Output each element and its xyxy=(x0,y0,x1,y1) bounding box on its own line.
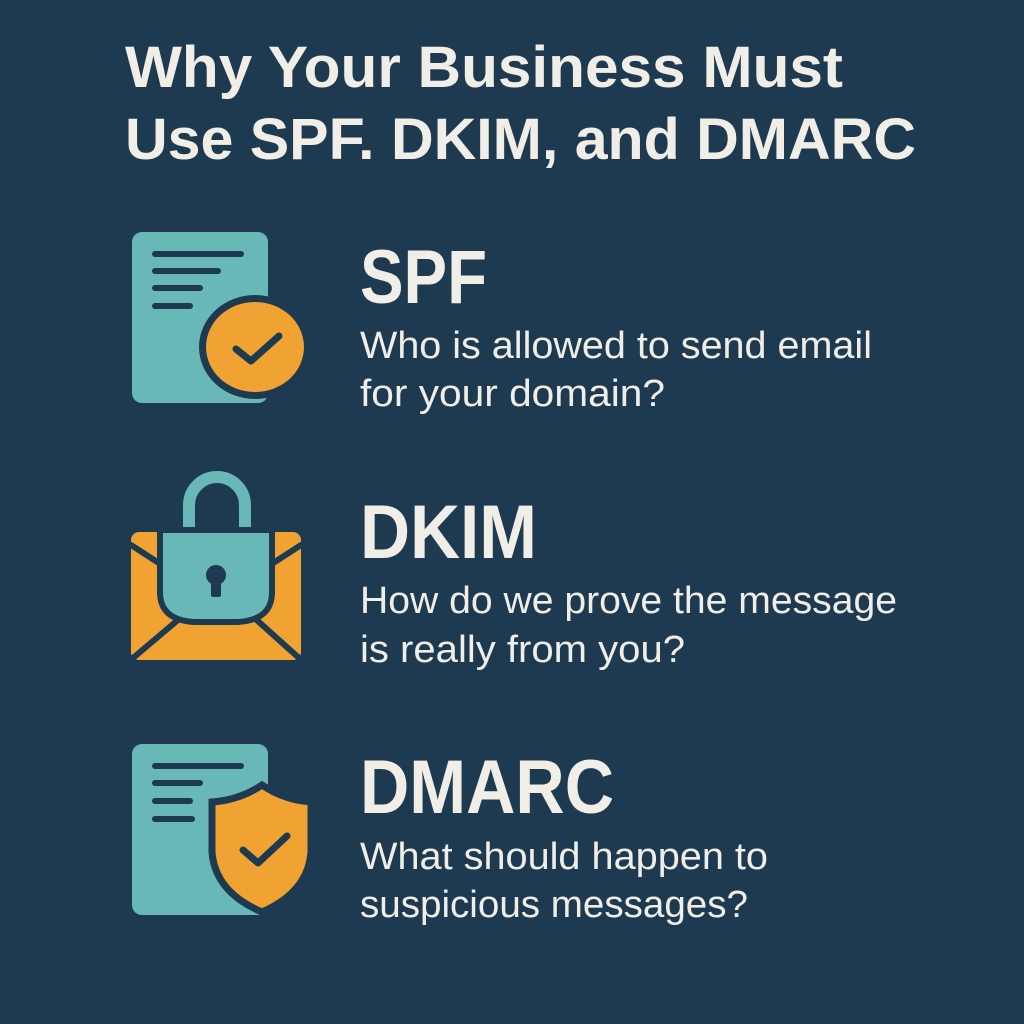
heading: SPF: Who is allowed to send email xyxy=(360,325,872,367)
heading: DKIM xyxy=(360,490,897,671)
heading: DMARC xyxy=(360,745,768,926)
title: Use SPF. DKIM, and DMARC xyxy=(125,107,916,172)
heading: DKIM: How do we prove the message xyxy=(360,580,897,622)
heading: SPF: SPF xyxy=(360,235,487,320)
title xyxy=(125,35,916,172)
heading: DKIM: DKIM xyxy=(360,490,537,575)
icon: DMARC document with shield xyxy=(132,744,311,915)
heading: DKIM: is really from you? xyxy=(360,629,685,671)
heading: SPF xyxy=(360,235,872,415)
title: Why Your Business Must xyxy=(125,35,843,100)
icon: DKIM envelope with lock xyxy=(131,477,301,660)
icon: SPF document with check xyxy=(132,232,311,403)
heading: SPF: for your domain? xyxy=(360,373,665,415)
heading: DMARC: DMARC xyxy=(360,745,614,830)
heading: DMARC: What should happen to xyxy=(360,836,768,878)
heading: DMARC: suspicious messages? xyxy=(360,884,748,926)
